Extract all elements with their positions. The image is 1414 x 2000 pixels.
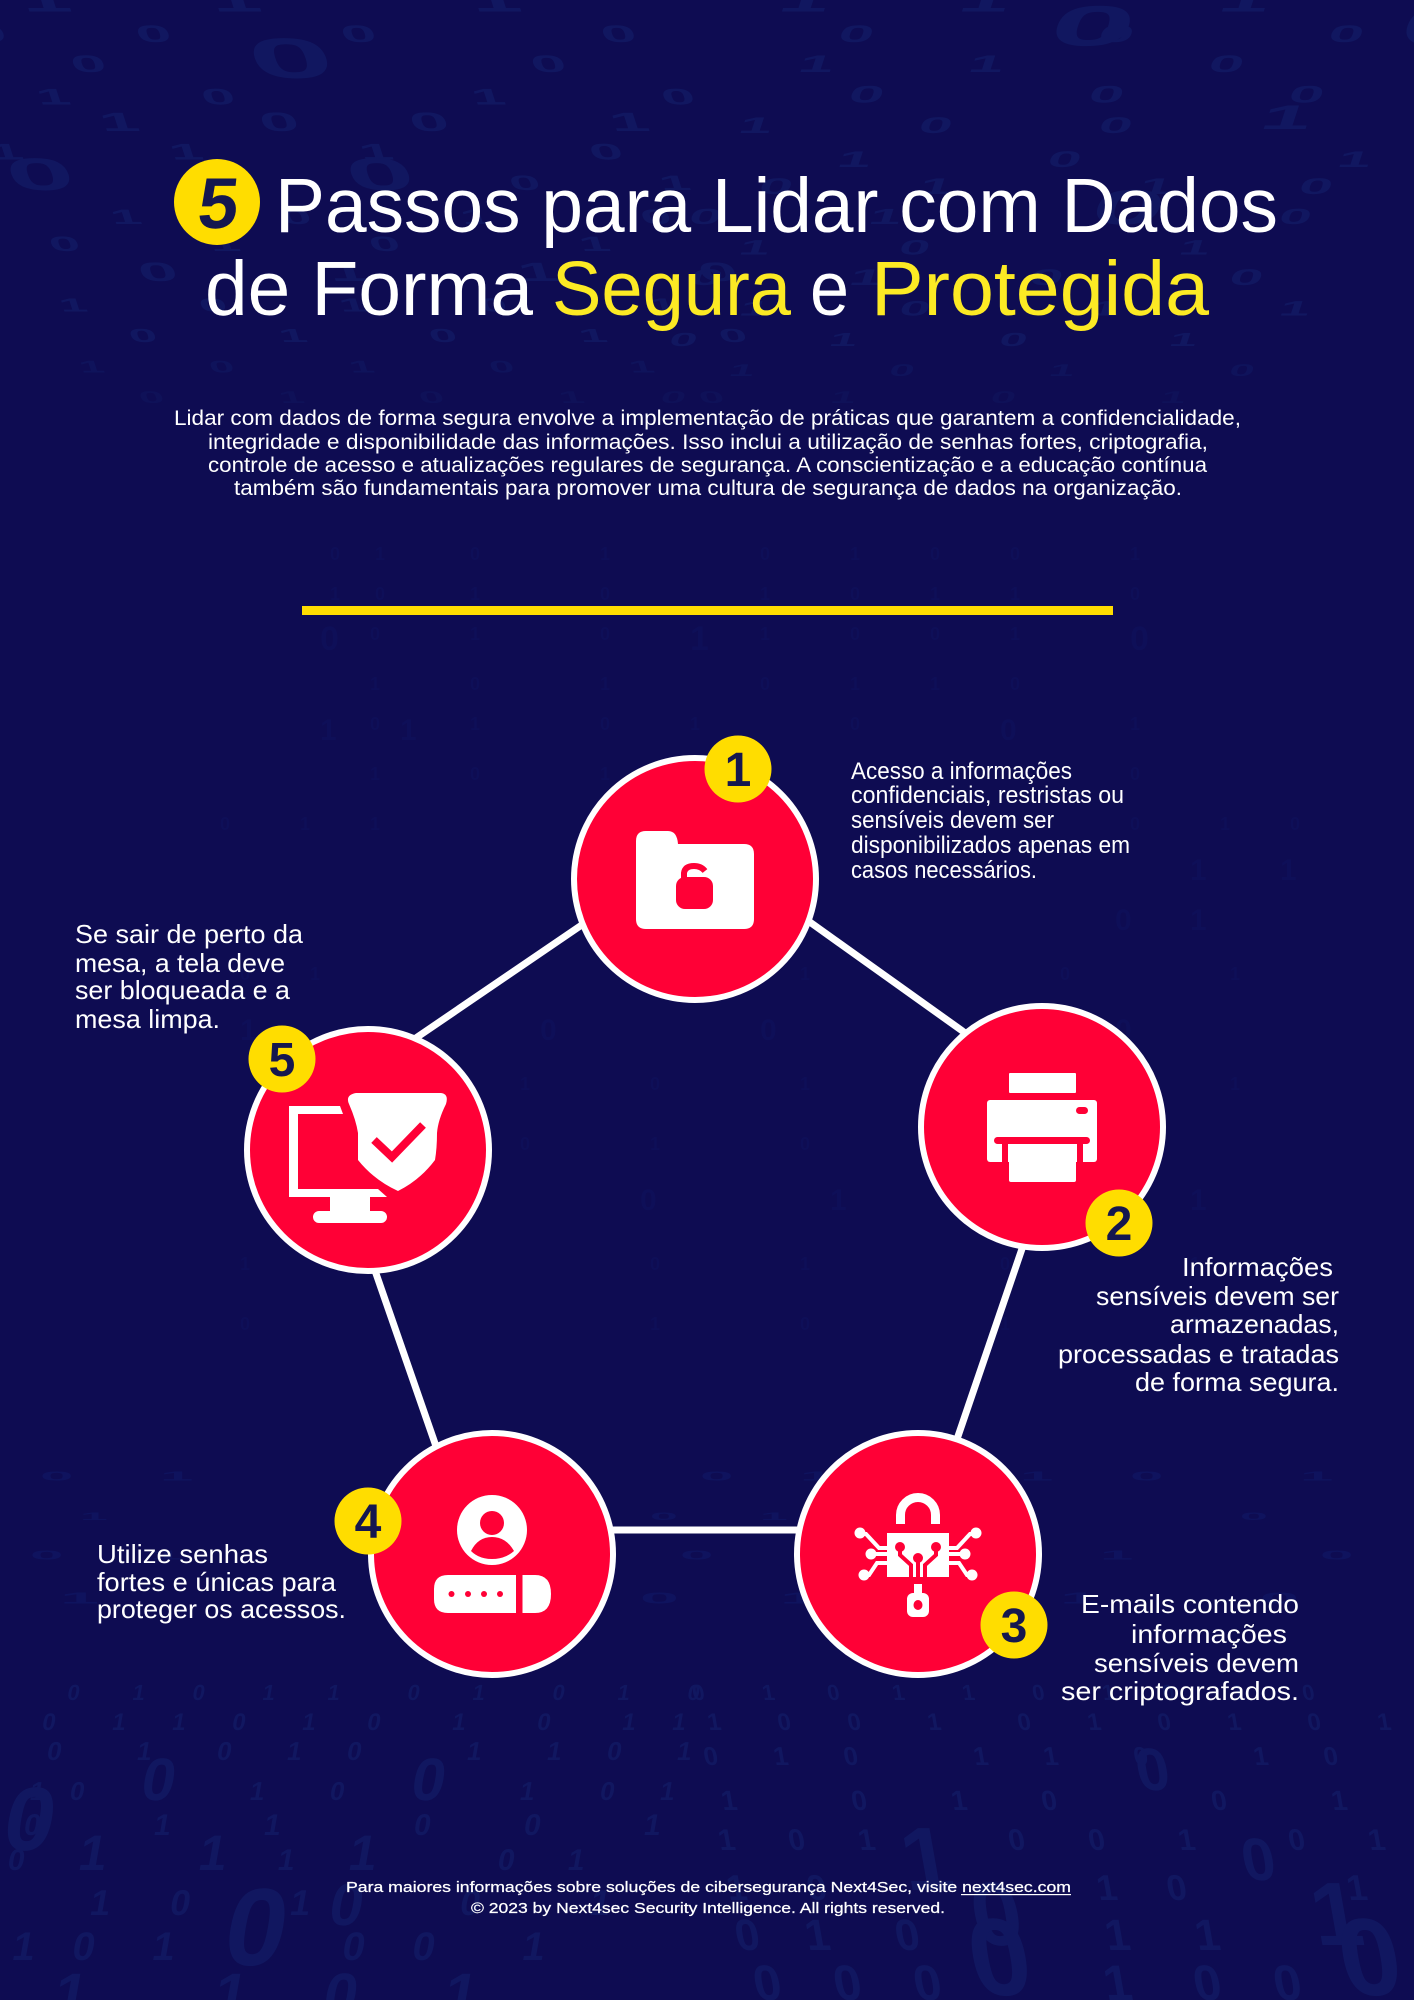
- text: 010: [686, 205, 1316, 229]
- text: 0101: [658, 388, 1189, 407]
- text: 0110: [755, 173, 1337, 199]
- text: 1010: [32, 84, 699, 109]
- text: 010101: [370, 714, 1140, 734]
- title line 2: e: [810, 246, 849, 332]
- text: 101010: [370, 764, 1140, 784]
- text: 101: [216, 171, 694, 194]
- text: 0110101011: [40, 1709, 688, 1736]
- divider bar: [302, 606, 1113, 615]
- intro paragraph: Lidar com dados de forma segura envolve a implementação de práticas que garantem a confidencialidade,: [174, 406, 1241, 430]
- text: 110: [320, 714, 1017, 747]
- text: 01011: [731, 1911, 1224, 1960]
- text: 000: [835, 21, 1368, 47]
- text: 1001010101: [705, 1709, 1393, 1736]
- text: 101001: [9, 1924, 549, 1969]
- step 5 text: mesa limpa.: [75, 1004, 220, 1034]
- text: 0101010: [30, 1548, 1353, 1563]
- step 2 text: de forma segura.: [1135, 1367, 1339, 1397]
- step 3 text: [1061, 1589, 1299, 1706]
- text: 1010: [726, 361, 1258, 380]
- badge 2: 2: [1106, 1198, 1132, 1251]
- text: 0101: [5, 1844, 588, 1877]
- text: 101: [736, 236, 1214, 259]
- text: 010101: [240, 964, 1240, 984]
- text: 01010: [520, 1134, 1140, 1154]
- text: 01010: [240, 1314, 1200, 1334]
- text: 01: [963, 1865, 1370, 1965]
- text: 1010101: [28, 1776, 677, 1806]
- text: 1011: [736, 296, 1314, 320]
- step 4 text: [97, 1539, 346, 1624]
- text: 01011010: [701, 1741, 1341, 1771]
- title line 2: Segura: [552, 246, 791, 332]
- step 3 text: informações: [1131, 1619, 1287, 1649]
- text: 01: [1115, 904, 1207, 937]
- title line 2: Protegida: [871, 246, 1209, 332]
- text: 0101101010: [690, 1680, 1317, 1705]
- text: 101: [834, 147, 1376, 172]
- text: 1010110: [370, 674, 1020, 694]
- text: 101010110: [330, 584, 1140, 604]
- icon: circuit padlock: [854, 1498, 982, 1617]
- step 1 text: disponibilizados apenas em: [851, 832, 1130, 859]
- step 5 text: ser bloqueada e a: [75, 975, 291, 1005]
- text: 10101: [240, 1254, 1200, 1274]
- footer: [346, 1880, 1071, 1917]
- text: 0: [1236, 1825, 1281, 1893]
- text: 1110: [0, 139, 627, 165]
- icon: printer: [987, 1073, 1097, 1182]
- step 2 text: sensíveis devem ser: [1096, 1281, 1339, 1311]
- text: 0100: [686, 265, 1267, 290]
- step 2 text: armazenadas,: [1170, 1309, 1339, 1339]
- pentagon diagram: [247, 736, 1163, 1675]
- title: [174, 159, 1278, 332]
- step 3 text: E-mails contendo: [1081, 1589, 1299, 1619]
- footer: Para maiores informações sobre soluções de cibersegurança Next4Sec, visite next4sec.com: [346, 1880, 1071, 1896]
- text: 0: [1084, 179, 1174, 235]
- step 5 node: [247, 1026, 489, 1271]
- step 1 text: sensíveis devem ser: [851, 807, 1054, 834]
- text: 10101: [56, 295, 681, 316]
- step 4 text: Utilize senhas: [97, 1539, 268, 1569]
- text: 1000: [240, 1014, 1132, 1047]
- step 3 node: [797, 1433, 1048, 1675]
- icon: number 5 badge: 5: [194, 164, 243, 244]
- connector lines: [372, 915, 1025, 1530]
- badge 3: [980, 1592, 1048, 1658]
- text: 0: [216, 1867, 298, 1989]
- text: 101010: [80, 1510, 1268, 1522]
- text: 10101: [76, 357, 657, 376]
- badge 4: 4: [355, 1496, 382, 1549]
- badge 5: [248, 1026, 316, 1092]
- intro paragraph: integridade e disponibilidade das informações. Isso inclui a utilização de senhas fortes, criptografia,: [208, 430, 1208, 454]
- intro paragraph: [174, 406, 1241, 500]
- text: 000: [845, 82, 1329, 108]
- text: 00: [137, 1745, 452, 1813]
- title line 2: de Forma: [205, 246, 533, 332]
- step 2 text: [1058, 1252, 1339, 1397]
- step 2 text: processadas e tratadas: [1058, 1339, 1339, 1369]
- text: 0: [1130, 1735, 1175, 1803]
- step 4 node: [334, 1433, 613, 1675]
- text: 111: [75, 1824, 382, 1881]
- text: 1010: [107, 205, 675, 229]
- icon: user password: [434, 1495, 551, 1613]
- step 1 text: [851, 758, 1130, 884]
- text: 00: [67, 51, 570, 78]
- text: 00: [0, 149, 422, 200]
- text: 1: [893, 1810, 961, 1910]
- text: 100: [735, 113, 1137, 138]
- badge 3: 3: [1001, 1600, 1027, 1653]
- text: 1001: [95, 108, 653, 137]
- text: 010: [320, 620, 1149, 658]
- text: 0101: [666, 329, 1201, 350]
- text: 10101: [723, 1867, 1370, 1908]
- badge 1: 1: [725, 744, 751, 797]
- text: 01010: [126, 326, 750, 346]
- step 1 text: confidenciais, restristas ou: [851, 782, 1124, 809]
- text: 010101101: [45, 1736, 695, 1766]
- step 5 text: [75, 919, 304, 1034]
- text: 11: [1190, 854, 1297, 887]
- badge 1: [704, 736, 772, 802]
- text: 101001: [718, 1784, 1350, 1816]
- icon: monitor with shield: [289, 1093, 447, 1223]
- text: 011010: [220, 814, 1300, 834]
- text: 011: [640, 1184, 1207, 1217]
- title line 1: Passos para Lidar com Dados: [275, 163, 1278, 249]
- intro paragraph: controle de acesso e atualizações regulares de segurança. A conscientização e a educação contínua: [208, 453, 1207, 477]
- text: 10100101: [715, 1824, 1388, 1857]
- title line 2: [205, 246, 1209, 332]
- step 2 text: Informações: [1182, 1252, 1333, 1282]
- text: 0101101010: [66, 1680, 702, 1705]
- text: 10101: [87, 1882, 614, 1923]
- text: 01010: [136, 388, 727, 407]
- step 2 node: [921, 1006, 1163, 1256]
- step 1 text: Acesso a informações: [851, 758, 1072, 785]
- step 1 text: casos necessários.: [851, 857, 1037, 884]
- badge 2: [1086, 1190, 1152, 1256]
- text: 01010101: [40, 1469, 1333, 1483]
- step 4 text: proteger os acessos.: [97, 1594, 346, 1624]
- text: 1: [1256, 98, 1318, 137]
- step 3 text: sensíveis devem: [1094, 1648, 1299, 1678]
- step 5 text: mesa, a tela deve: [75, 948, 285, 978]
- step 3 text: ser criptografados.: [1061, 1676, 1299, 1706]
- badge 5: 5: [269, 1034, 295, 1087]
- step 4 text: fortes e únicas para: [97, 1567, 337, 1597]
- text: 10101: [520, 1074, 1240, 1094]
- badge 4: [334, 1488, 402, 1554]
- icon: number 5 badge: [174, 159, 260, 245]
- footer: © 2023 by Next4sec Security Intelligence. All rights reserved.: [471, 1901, 945, 1917]
- step 5 text: Se sair de perto da: [75, 919, 304, 949]
- intro paragraph: também são fundamentais para promover uma cultura de segurança de dados na organização.: [234, 476, 1182, 500]
- text: 0: [239, 27, 343, 90]
- text: 110: [795, 51, 1248, 78]
- text: 0: [325, 1870, 370, 1938]
- text: 011001: [21, 1809, 664, 1842]
- text: 010101001: [330, 544, 1140, 564]
- text: 0101001: [370, 624, 1020, 644]
- text: 0101: [45, 232, 614, 255]
- step 1 node: [574, 736, 816, 1000]
- text: 101010: [60, 1590, 1299, 1607]
- icon: unlocked folder: [636, 831, 754, 929]
- text: 0110: [134, 258, 742, 287]
